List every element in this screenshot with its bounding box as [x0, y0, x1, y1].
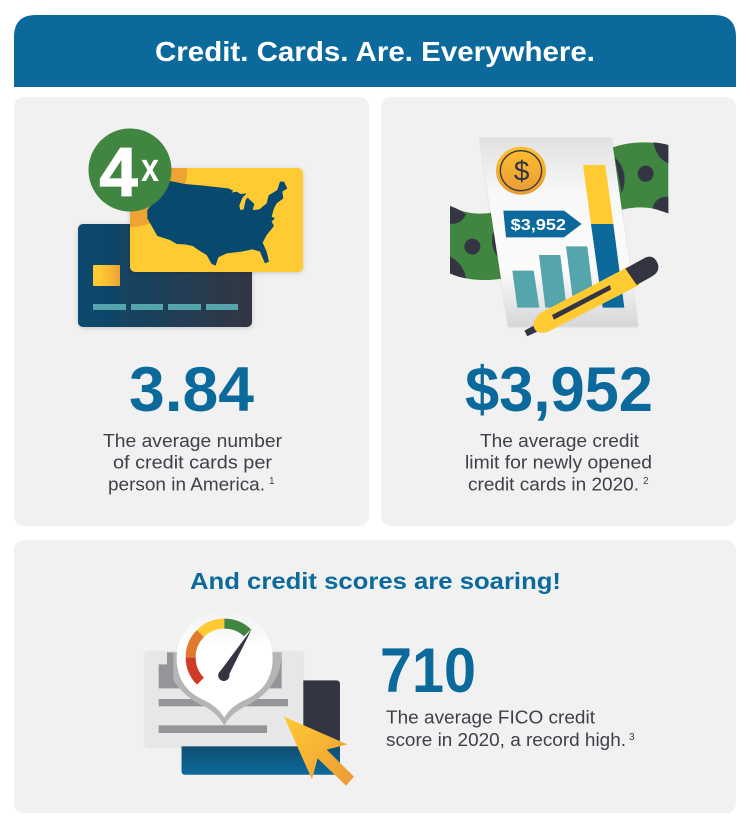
pen	[524, 257, 658, 336]
description: person in America.	[108, 474, 265, 494]
description	[386, 706, 635, 750]
badge: 4x	[88, 128, 172, 212]
description: The average number	[103, 430, 282, 451]
description: 1	[269, 476, 275, 487]
header banner	[14, 15, 736, 87]
report page	[479, 138, 638, 327]
gauge pin	[177, 610, 273, 717]
tag: $3,952: $3,952	[511, 217, 566, 234]
back card	[182, 680, 340, 775]
description: limit for newly opened	[465, 452, 652, 472]
illustration: credit cards with US map	[73, 113, 303, 327]
description: 2	[643, 476, 649, 487]
badge: 4x: x	[141, 146, 159, 190]
description	[103, 430, 282, 494]
cursor arrow	[284, 717, 354, 786]
stat: 710: 710	[380, 636, 476, 706]
description: 3	[629, 732, 635, 743]
money band	[450, 142, 668, 280]
heading: And credit scores are soaring!	[190, 568, 561, 594]
description: The average credit	[480, 430, 639, 451]
tag: $3,952	[503, 211, 582, 237]
description	[465, 430, 652, 494]
front document	[145, 652, 303, 746]
illustration: score gauge	[145, 610, 354, 786]
description: score in 2020, a record high.	[386, 729, 626, 750]
description: of credit cards per	[113, 452, 272, 472]
stat: 3.84: 3.84	[129, 355, 254, 425]
panel: average credit limit	[381, 97, 736, 526]
description: The average FICO credit	[386, 706, 595, 728]
panel: cards per person	[14, 97, 369, 526]
badge: 4x: 4	[99, 134, 138, 210]
yellow card with map of the US	[128, 167, 305, 275]
title: Credit. Cards. Are. Everywhere.	[155, 36, 595, 67]
illustration: credit limit report	[450, 138, 668, 336]
coin: $	[514, 155, 530, 186]
dark credit card	[78, 224, 252, 327]
stat: $3,952: $3,952	[465, 355, 653, 425]
bar chart	[512, 165, 624, 308]
panel: credit scores	[14, 540, 736, 813]
coin	[496, 147, 546, 195]
description: credit cards in 2020.	[468, 474, 639, 494]
